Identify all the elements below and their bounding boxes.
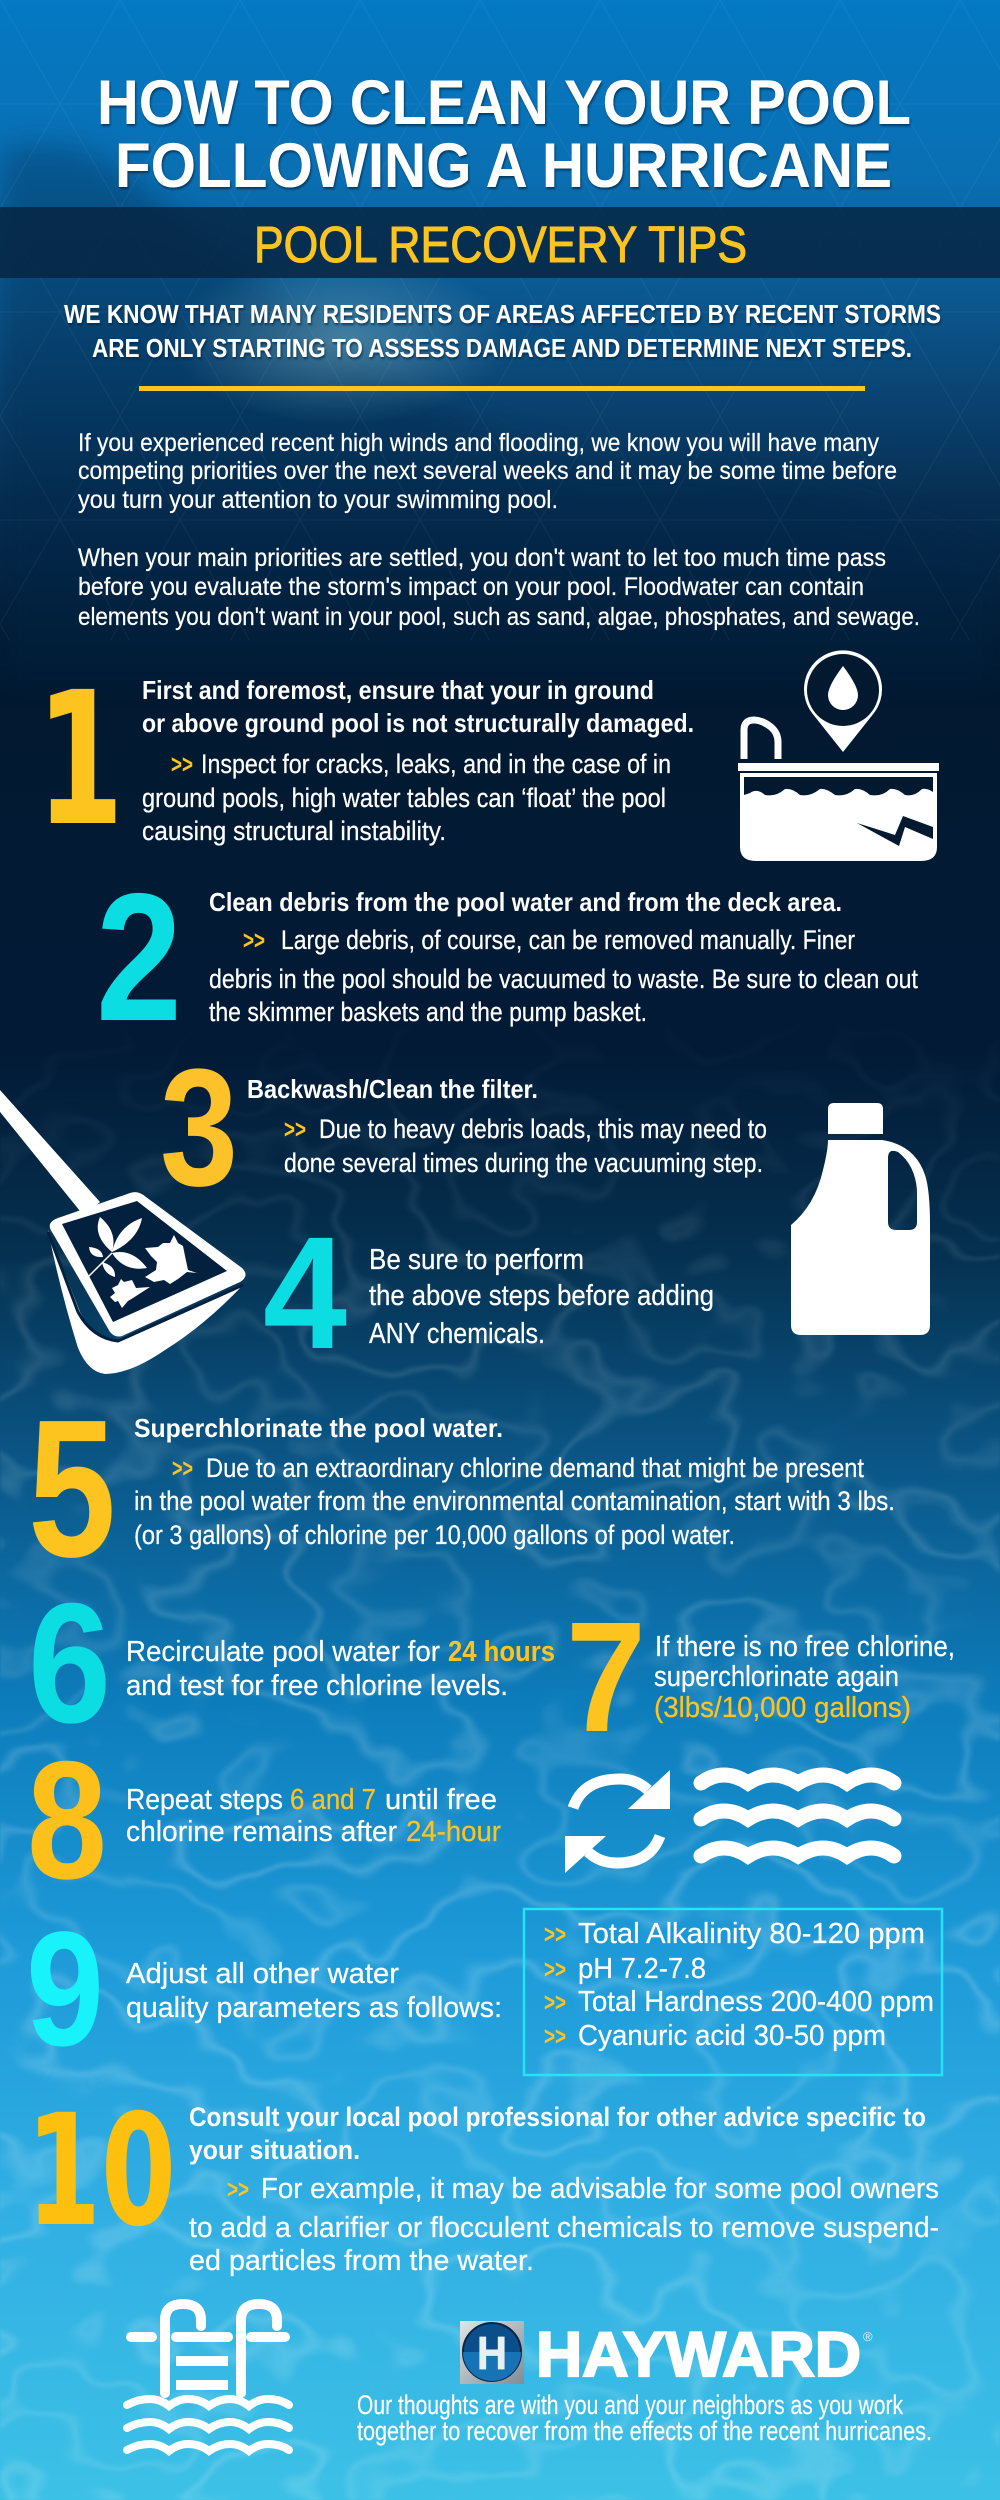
intro headline (64, 299, 941, 363)
intro paragraph 1: you turn your attention to your swimming pool. (78, 486, 558, 514)
step 3 text: Backwash/Clean the filter. (247, 1074, 538, 1104)
step 10 text: For example, it may be advisable for some pool owners (261, 2173, 939, 2205)
step 9 text: quality parameters as follows: (126, 1992, 502, 2024)
icon: skimmer net with leaves (0, 1090, 246, 1374)
step 1 text: ground pools, high water tables can ‘float’ the pool (142, 783, 666, 813)
step 8 text: until free (385, 1784, 497, 1816)
panel: water parameters: >> (544, 1954, 566, 1984)
step 7 text: If there is no free chlorine, (655, 1631, 955, 1663)
icon: recirculation arrows (565, 1770, 670, 1873)
step 8 text (126, 1784, 501, 1848)
step 1 text: or above ground pool is not structurally damaged. (142, 708, 694, 738)
number 9: 9 (26, 1897, 104, 2080)
icon: chemical bottle (791, 1103, 930, 1335)
step 9 text (126, 1958, 502, 2024)
step 10 text: to add a clarifier or flocculent chemicals to remove suspend- (189, 2212, 939, 2244)
step 9 text: Adjust all other water (126, 1958, 399, 1990)
number 6: 6 (28, 1568, 111, 1759)
closing message (357, 2390, 932, 2446)
logo: Hayward: HAYWARD (536, 2320, 861, 2390)
step 5 text: >> (172, 1453, 193, 1483)
step 5 text: Superchlorinate the pool water. (134, 1413, 503, 1443)
title: FOLLOWING A HURRICANE (115, 131, 892, 201)
step 6 text: and test for free chlorine levels. (126, 1670, 508, 1702)
step 10 text: >> (227, 2174, 249, 2204)
step 10 text: your situation. (189, 2135, 360, 2165)
step 4 text (369, 1244, 714, 1350)
icon: pool ladder and water (127, 2304, 289, 2451)
logo: Hayward: ® (863, 2329, 873, 2344)
intro paragraph 1: If you experienced recent high winds and flooding, we know you will have many (78, 429, 879, 457)
step 5 text: in the pool water from the environmental contamination, start with 3 lbs. (134, 1486, 895, 1516)
step 6 text: Recirculate pool water for (126, 1636, 440, 1668)
step 1 text: causing structural instability. (142, 816, 446, 846)
panel: water parameters: >> (544, 1919, 566, 1949)
step 5 text: Due to an extraordinary chlorine demand that might be present (206, 1453, 864, 1483)
number 7: 7 (566, 1590, 646, 1765)
step 10 text (189, 2102, 939, 2277)
number 2: 2 (96, 855, 182, 1059)
step 8 text: Repeat steps (126, 1784, 283, 1816)
intro paragraph 2: before you evaluate the storm's impact on your pool. Floodwater can contain (78, 573, 864, 601)
step 10 text: Consult your local pool professional for other advice specific to (189, 2102, 926, 2132)
step 5 text (134, 1413, 895, 1550)
panel: water parameters: >> (544, 1987, 566, 2017)
number 3: 3 (160, 1035, 238, 1221)
step 1 text (142, 675, 694, 846)
step 3 text: done several times during the vacuuming step. (284, 1148, 763, 1178)
step 2 text: Large debris, of course, can be removed manually. Finer (281, 925, 855, 955)
title (97, 68, 911, 201)
step 2 text: >> (243, 925, 265, 955)
step 1 text: >> (171, 749, 193, 779)
step 1 text: Inspect for cracks, leaks, and in the case of in (201, 749, 671, 779)
number 1: 1 (36, 653, 124, 867)
step 2 text (209, 887, 918, 1027)
number 10: 10 (26, 2082, 176, 2261)
number 5: 5 (28, 1379, 116, 1598)
step 3 text: Due to heavy debris loads, this may need to (319, 1114, 767, 1144)
step 8 text: chlorine remains after (126, 1816, 397, 1848)
yellow divider (139, 386, 865, 391)
step 6 text: 24 hours (448, 1636, 555, 1668)
step 8 text: 6 and 7 (290, 1784, 376, 1816)
intro paragraph 2: elements you don't want in your pool, such as sand, algae, phosphates, and sewage. (78, 603, 920, 631)
subtitle band: pool recovery tips: POOL RECOVERY TIPS (254, 216, 747, 273)
step 1 text: First and foremost, ensure that your in ground (142, 675, 654, 705)
logo: Hayward: H (477, 2327, 507, 2379)
step 7 text: superchlorinate again (654, 1661, 899, 1693)
intro paragraph 1 (78, 429, 897, 514)
number 8: 8 (27, 1726, 107, 1914)
title: HOW TO CLEAN YOUR POOL (97, 68, 911, 138)
step 4 text: Be sure to perform (369, 1244, 584, 1276)
icon: waves (701, 1775, 894, 1856)
number 4: 4 (263, 1203, 347, 1382)
step 3 text: >> (284, 1114, 306, 1144)
step 6 text (126, 1636, 555, 1702)
subtitle band: pool recovery tips (0, 207, 1000, 278)
step 5 text: (or 3 gallons) of chlorine per 10,000 gallons of pool water. (134, 1520, 735, 1550)
step 8 text: 24-hour (406, 1816, 501, 1848)
step 7 text: (3lbs/10,000 gallons) (654, 1692, 911, 1724)
step 4 text: the above steps before adding (369, 1280, 714, 1312)
intro paragraph 2 (78, 544, 920, 631)
intro paragraph 2: When your main priorities are settled, you don't want to let too much time pass (78, 544, 886, 572)
panel: water parameters: pH 7.2-7.8 (578, 1953, 706, 1985)
step 10 text: ed particles from the water. (189, 2245, 534, 2277)
step 2 text: the skimmer baskets and the pump basket. (209, 997, 647, 1027)
intro paragraph 1: competing priorities over the next several weeks and it may be some time before (78, 457, 897, 485)
panel: water parameters (524, 1909, 942, 2075)
step 2 text: Clean debris from the pool water and from the deck area. (209, 887, 842, 917)
panel: water parameters: Total Alkalinity 80-120 ppm (578, 1918, 925, 1950)
step 7 text (654, 1631, 955, 1724)
step 4 text: ANY chemicals. (369, 1318, 545, 1350)
icon: pool with crack and location pin (738, 650, 939, 861)
panel: water parameters: >> (544, 2021, 566, 2051)
panel: water parameters: Cyanuric acid 30-50 ppm (578, 2020, 886, 2052)
step 3 text (247, 1074, 767, 1178)
panel: water parameters: Total Hardness 200-400 ppm (578, 1986, 934, 2018)
